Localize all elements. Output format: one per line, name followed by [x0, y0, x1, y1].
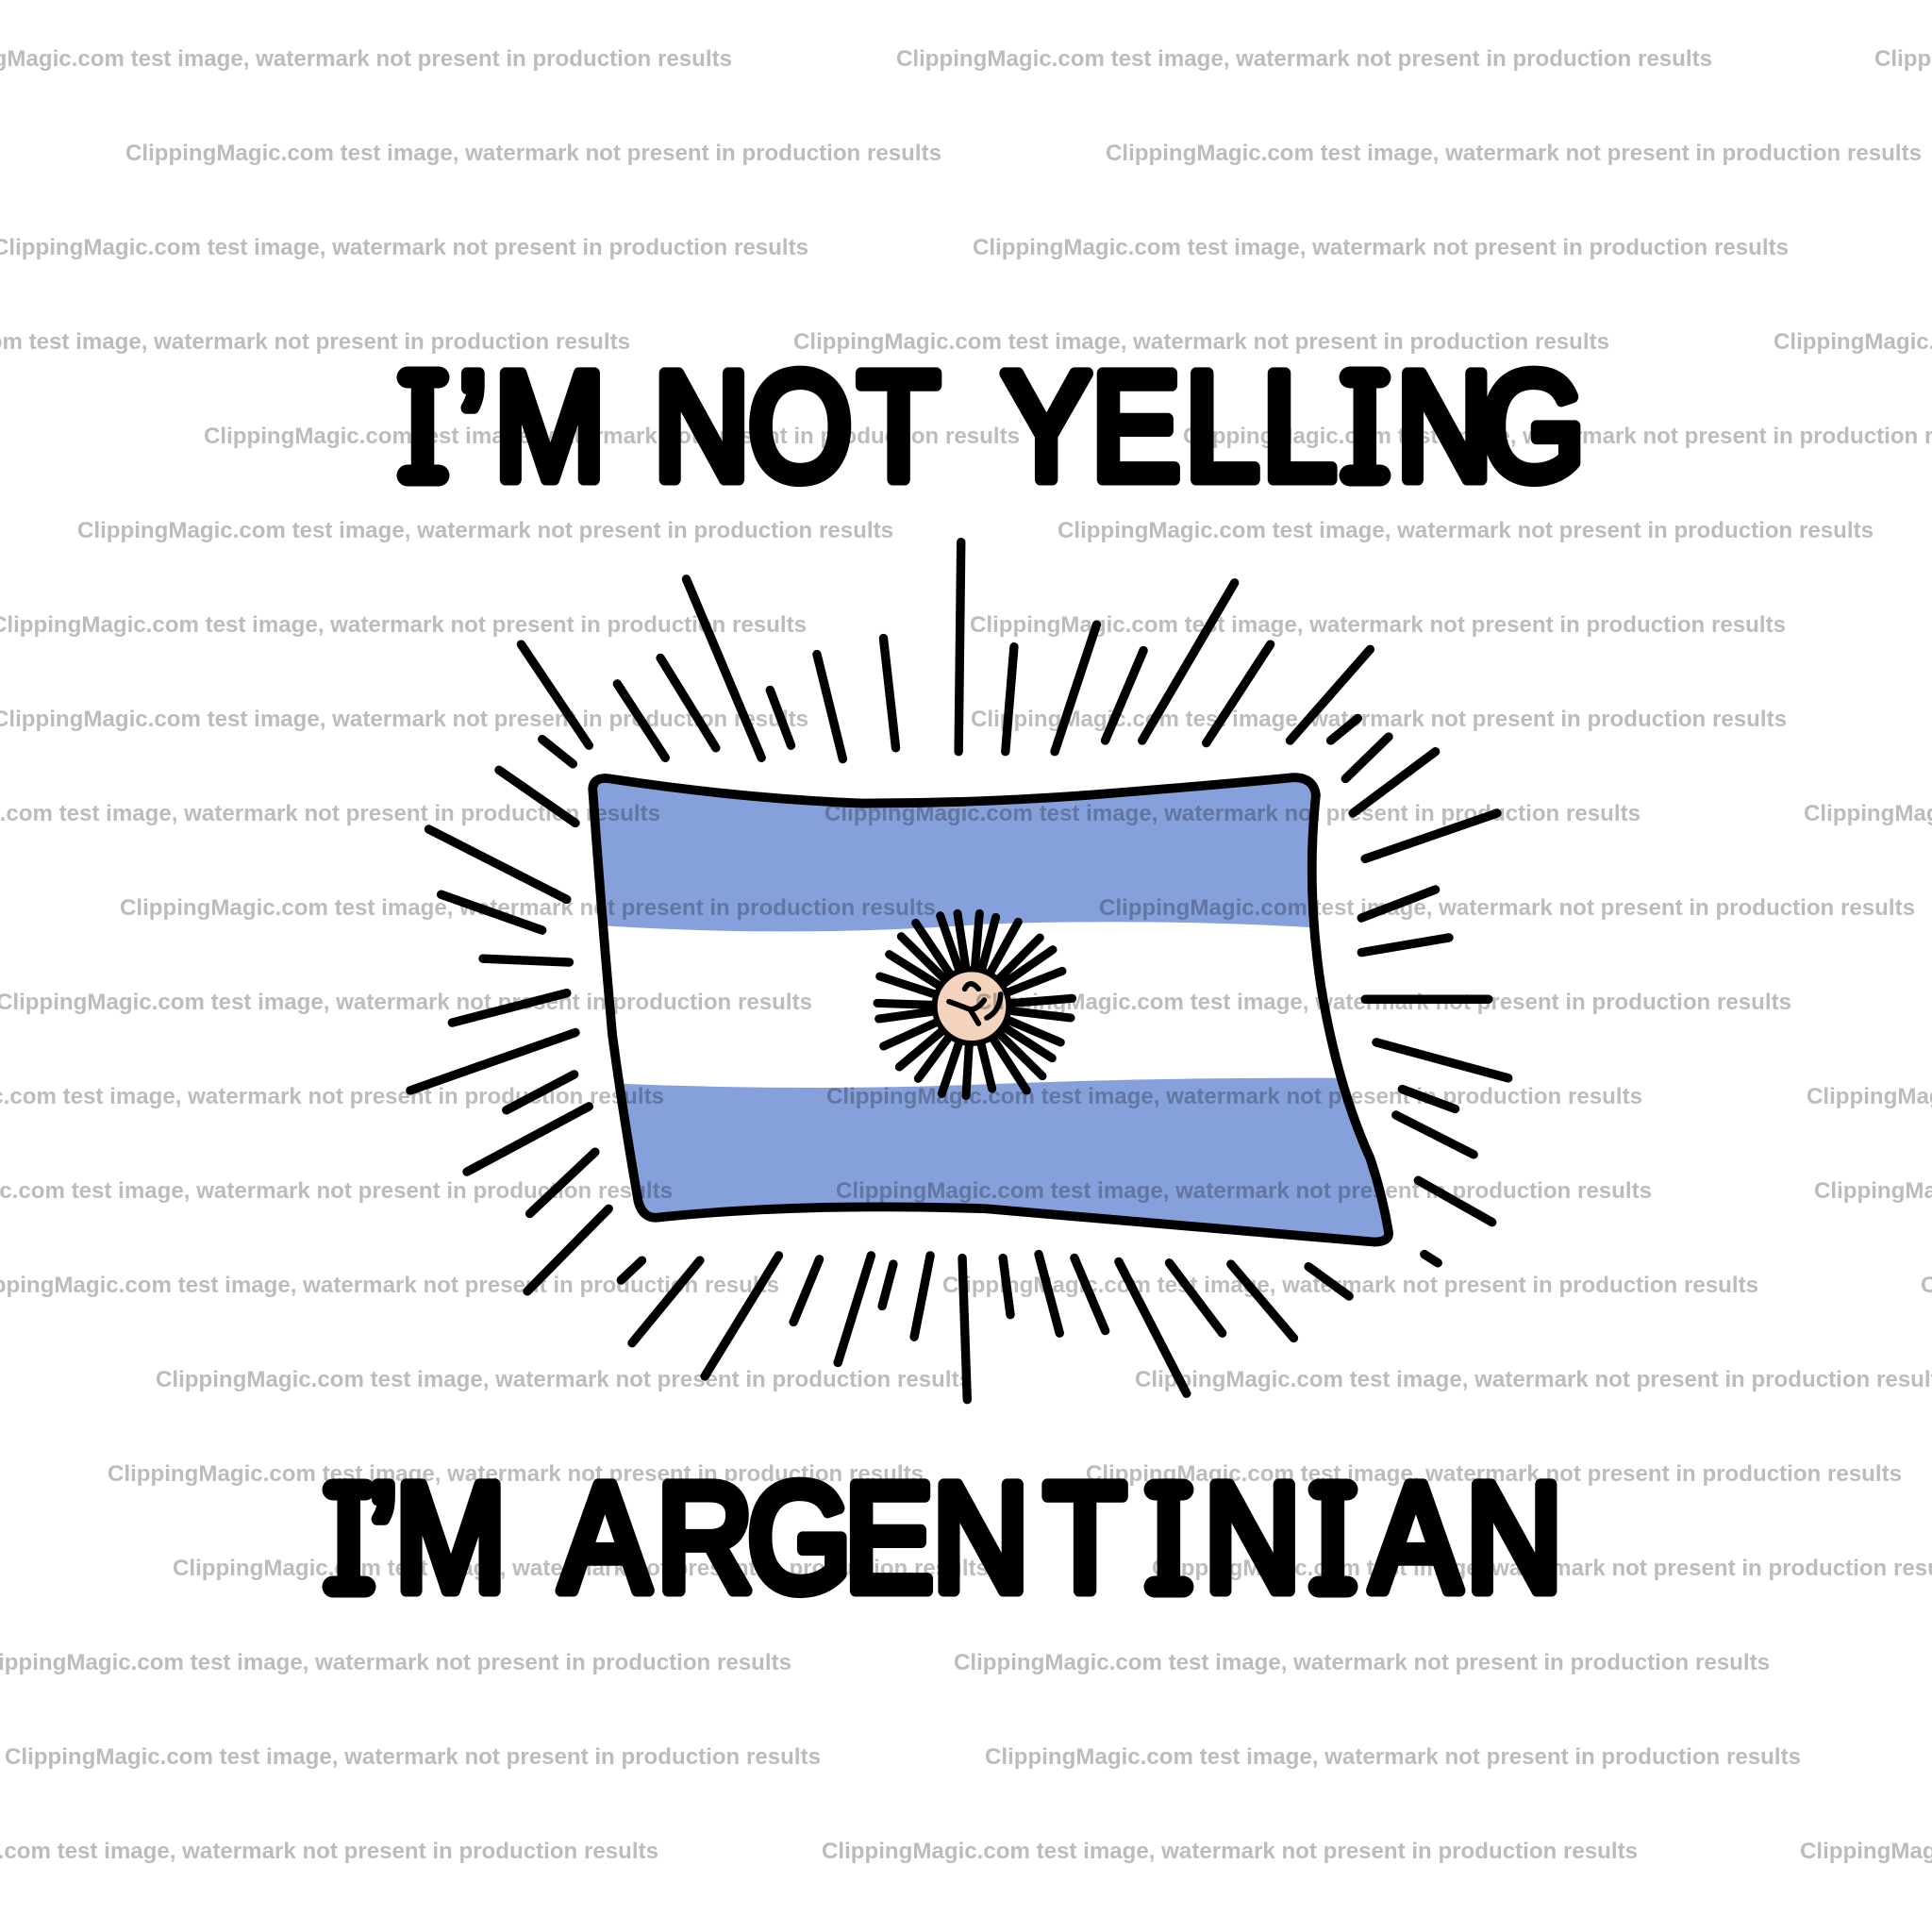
watermark text rows: ClippingMagic.com test image, watermark not present in production results [824, 801, 1641, 826]
watermark text rows: ClippingMagic.com test image, watermark not present in production results [896, 46, 1712, 72]
watermark text rows: ClippingMagic.com test image, watermark not present in production results [836, 1178, 1652, 1204]
watermark text rows: ClippingMagic.com test image, watermark not present in production results [822, 1839, 1638, 1864]
watermark text rows: ClippingMagic.com test image, watermark not present in production results [156, 1367, 972, 1392]
watermark text rows: ClippingMagic.com test image, watermark not present in production results [793, 329, 1609, 355]
watermark text rows: ClippingMagic.com test image, watermark not present in production results [77, 518, 893, 543]
watermark text rows: ClippingMagic.com test image, watermark not present in production results [0, 612, 807, 638]
watermark text rows: ClippingMagic.com test image, watermark not present in production results [971, 707, 1787, 732]
watermark text rows: ClippingMagic.com test image, watermark not present in production results [120, 895, 936, 921]
watermark text rows: ClippingMagic.com test image, watermark not present in production results [1135, 1367, 1932, 1392]
watermark text rows: ClippingMagic.com test image, watermark not present in production results [954, 1650, 1770, 1675]
title: I'm Argentinian: I’M ARGENTINIAN [330, 1453, 1562, 1624]
watermark text rows: ClippingMagic.com test image, watermark not present in production results [1106, 141, 1922, 166]
watermark text rows: ClippingMagic.com test image, watermark not present in production results [204, 424, 1020, 449]
watermark text rows: ClippingMagic.com test image, watermark not present in production results [826, 1084, 1642, 1109]
watermark text rows: ClippingMagic.com test image, watermark not present in production results [108, 1461, 924, 1487]
title: I'm not yelling: I’M NOT YELLING [404, 341, 1585, 512]
watermark text rows: ClippingMagic.com test image, watermark not present in production results [973, 235, 1789, 260]
watermark text rows: ClippingMagic.com test image, watermark not present in production results [970, 612, 1786, 638]
watermark text rows: ClippingMagic.com test image, watermark not present in production results [0, 990, 812, 1015]
watermark text rows: ClippingMagic.com test image, watermark not present in production results [125, 141, 941, 166]
watermark text rows: ClippingMagic.com test image, watermark not present in production results [1086, 1461, 1902, 1487]
watermark text rows: ClippingMagic.com test image, watermark not present in production results [1099, 895, 1915, 921]
watermark text rows: ClippingMagic.com test image, watermark not present in production results [975, 990, 1791, 1015]
watermark text rows: ClippingMagic.com test image, watermark not present in production results [0, 707, 808, 732]
watermark text rows: ClippingMagic.com test image, watermark not present in production results [942, 1273, 1758, 1298]
Argentine flag [579, 764, 1405, 1257]
watermark text rows: ClippingMagic.com test image, watermark not present in production results [985, 1744, 1801, 1770]
watermark text rows: ClippingMagic.com test image, watermark not present in production results [173, 1556, 989, 1581]
watermark text rows: ClippingMagic.com test image, watermark not present in production results [5, 1744, 821, 1770]
icon: sun of May [877, 913, 1073, 1096]
sunburst rays around the flag [410, 542, 1508, 1400]
watermark text rows: ClippingMagic.com test image, watermark not present in production results [0, 235, 808, 260]
watermark text rows: ClippingMagic.com test image, watermark not present in production results [1058, 518, 1874, 543]
